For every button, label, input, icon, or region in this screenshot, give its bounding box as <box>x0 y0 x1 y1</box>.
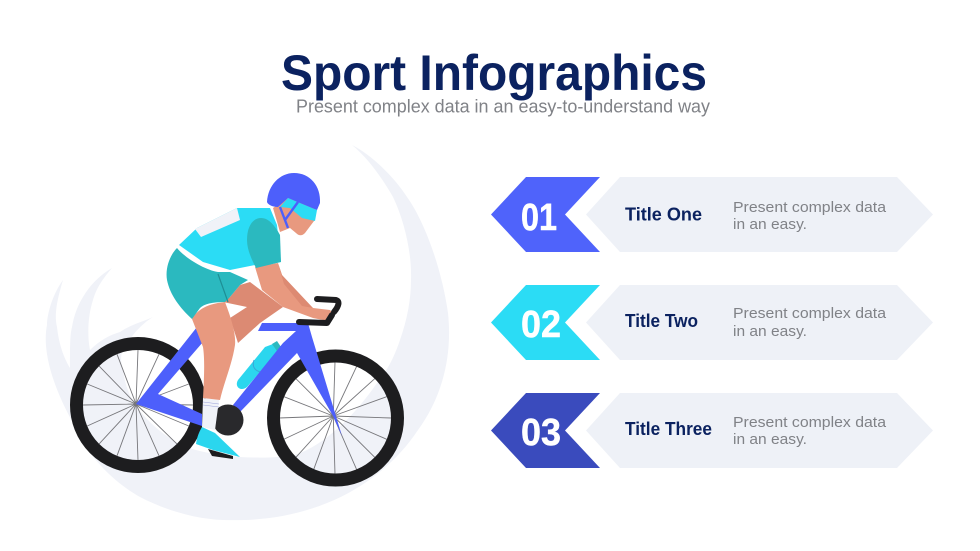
water bottle <box>237 341 281 389</box>
heading 1: Title One <box>625 204 702 224</box>
number 2: 02 <box>521 304 561 346</box>
sock <box>202 398 219 430</box>
jersey <box>179 208 281 270</box>
panel 2 <box>586 285 933 360</box>
arrow 3 <box>491 393 600 468</box>
front leg <box>192 302 235 400</box>
item 2 <box>491 285 933 360</box>
bike frame <box>136 323 342 436</box>
white jersey hem <box>177 245 263 285</box>
sleeve <box>247 218 281 268</box>
description 1: Present complex data <box>733 199 887 216</box>
number 1: 01 <box>521 197 557 239</box>
description 2: in an easy. <box>733 323 807 340</box>
jersey back panel <box>195 208 240 237</box>
background swoosh <box>46 145 449 520</box>
rear wheel <box>76 344 200 466</box>
item 1 <box>491 177 933 252</box>
front wheel <box>274 356 398 480</box>
heading 2: Title Two <box>625 311 698 331</box>
shoe <box>196 427 240 457</box>
rear leg <box>223 282 283 343</box>
item 3 <box>491 393 933 468</box>
panel 1 <box>586 177 933 252</box>
arrow 1 <box>491 177 600 252</box>
number 3: 03 <box>521 412 561 454</box>
sole <box>208 449 233 459</box>
helmet <box>267 173 320 210</box>
description 1: in an easy. <box>733 216 807 233</box>
far arm shade <box>278 263 313 308</box>
subtitle: Present complex data in an easy-to-understand way <box>296 96 710 116</box>
description 2: Present complex data <box>733 305 887 322</box>
panel 3 <box>586 393 933 468</box>
illustration: cyclist <box>46 145 449 520</box>
heading 3: Title Three <box>625 419 712 439</box>
visor <box>280 198 317 221</box>
handlebars <box>299 299 338 323</box>
near arm <box>255 263 335 321</box>
title: Sport Infographics <box>281 45 707 101</box>
description 3: Present complex data <box>733 414 887 431</box>
helmet straps <box>280 202 298 228</box>
shorts seam <box>218 274 228 302</box>
arrow 2 <box>491 285 600 360</box>
neck and face <box>273 198 315 235</box>
description 3: in an easy. <box>733 431 807 448</box>
shorts <box>167 248 248 319</box>
crank <box>212 404 244 436</box>
